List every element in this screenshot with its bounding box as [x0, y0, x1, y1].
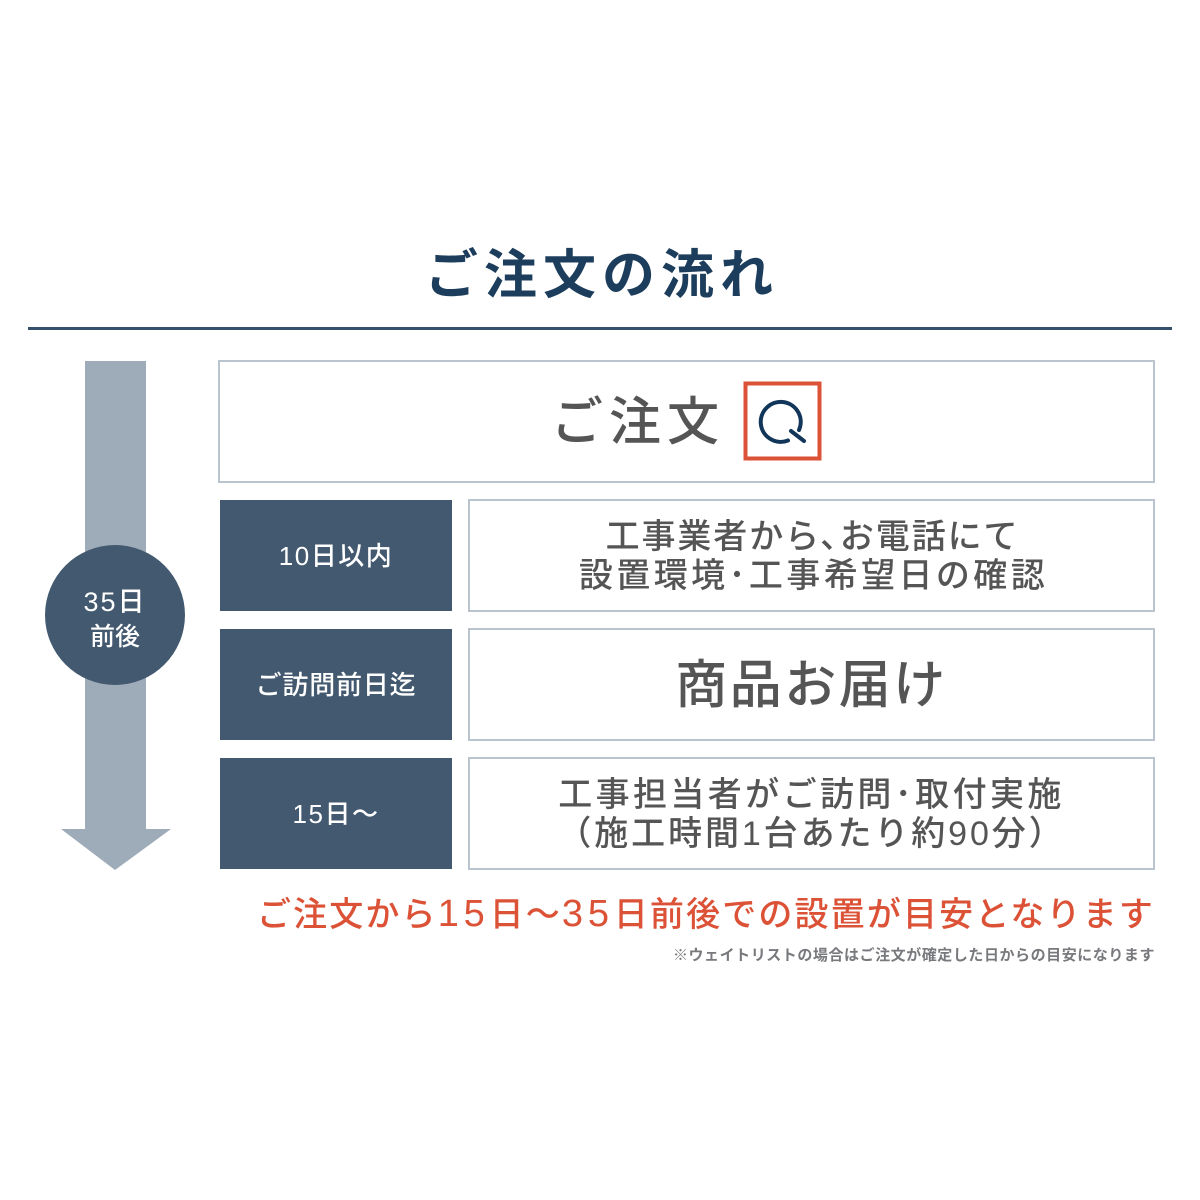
step 3 text — [557, 776, 1066, 853]
step 2 text: 商品お届け — [675, 657, 948, 715]
badge text line 1: 35日 — [83, 587, 147, 617]
callout: lead time: ご注文から15日～35日前後での設置が目安となります — [257, 893, 1155, 935]
step 1 text — [579, 518, 1048, 595]
step 1 panel — [468, 499, 1155, 612]
step 3 timing: 15日～ — [293, 799, 379, 829]
step 3 text: 工事担当者がご訪問･取付実施 — [558, 776, 1065, 814]
step 3 text: （施工時間1台あたり約90分） — [557, 815, 1066, 853]
step 1 text: 工事業者から､お電話にて — [606, 518, 1019, 556]
badge: 35 days — [45, 545, 185, 685]
step 2 panel — [468, 628, 1155, 741]
badge text line 2: 前後 — [90, 623, 140, 651]
arrow: 35 day timeline — [61, 361, 171, 870]
icon: Q logo — [744, 382, 822, 460]
step 2 timing — [220, 629, 452, 740]
step 3 timing — [220, 758, 452, 869]
title underline — [28, 327, 1172, 330]
step 1 text: 設置環境･工事希望日の確認 — [579, 557, 1048, 595]
step 1 timing: 10日以内 — [279, 541, 393, 571]
panel: order — [218, 360, 1155, 483]
footnote: ※ウェイトリストの場合はご注文が確定した日からの目安になります — [673, 947, 1155, 964]
step 1 timing — [220, 500, 452, 611]
title: ご注文の流れ — [425, 246, 779, 305]
step 3 panel — [468, 757, 1155, 870]
step 2 timing: ご訪問前日迄 — [256, 670, 416, 700]
order label: ご注文 — [551, 394, 725, 452]
